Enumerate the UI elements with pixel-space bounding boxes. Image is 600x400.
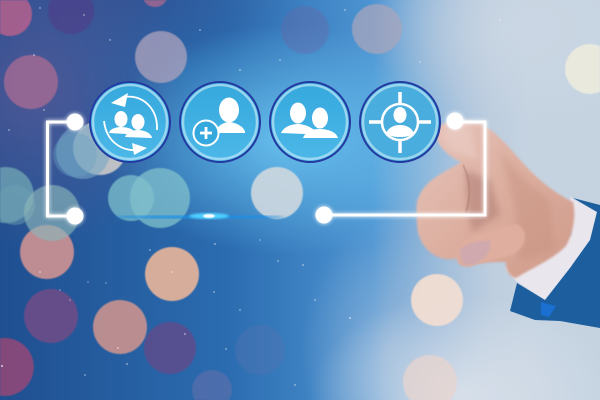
two people — [109, 111, 152, 138]
star specks — [1, 7, 501, 386]
shirt cuff — [505, 197, 597, 300]
finger shading — [440, 125, 555, 262]
jacket sleeve — [510, 198, 600, 328]
hand shape — [416, 121, 574, 278]
icon: rotating people — [89, 81, 171, 163]
hand pointing at icons — [416, 121, 600, 328]
thumbnail — [460, 241, 490, 265]
thumb — [458, 224, 525, 266]
connector frame: left bracket — [48, 114, 84, 224]
connector frame: right bracket — [316, 112, 485, 224]
icon: people group — [269, 81, 351, 163]
icon: person target — [359, 81, 441, 163]
horizontal lens flare — [115, 213, 285, 219]
icon: add person — [179, 81, 261, 163]
swap arrows — [104, 97, 157, 150]
